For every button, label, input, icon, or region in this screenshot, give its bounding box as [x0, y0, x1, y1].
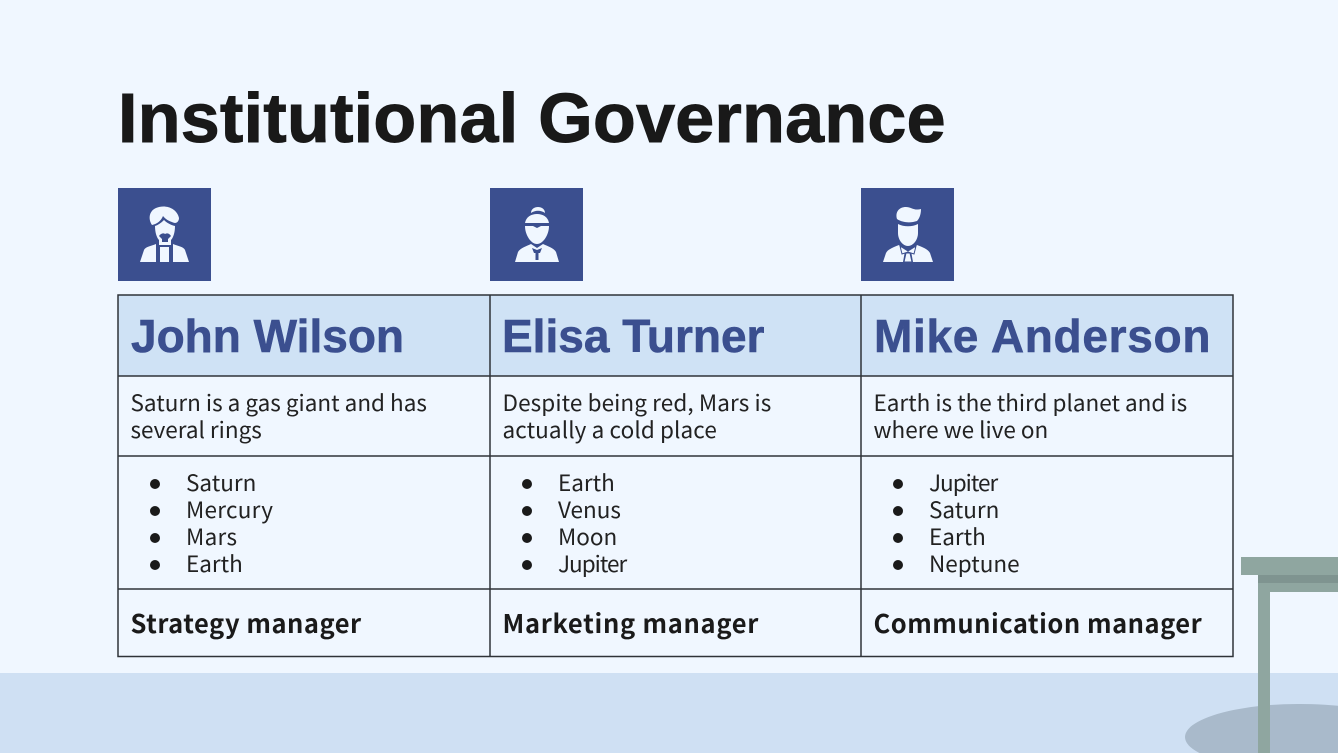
role: Communication manager [874, 604, 1202, 641]
table and shadow illustration [1185, 557, 1338, 753]
floor band [0, 673, 1338, 753]
planet list [150, 466, 273, 579]
name: Mike Anderson [874, 310, 1211, 362]
icon: man with beard [118, 188, 211, 281]
title: Institutional Governance [118, 79, 946, 157]
planet list: Earth [558, 466, 615, 498]
role: Marketing manager [502, 604, 759, 641]
name: John Wilson [131, 310, 404, 362]
column: Mike Anderson [874, 310, 1211, 641]
column: Elisa Turner [502, 310, 771, 641]
planet list: Jupiter [558, 547, 626, 579]
planet list: Saturn [186, 466, 256, 498]
planet list: Mars [186, 520, 237, 552]
table panel [117, 294, 1234, 658]
description: actually a cold place [502, 413, 717, 445]
column: John Wilson [130, 310, 427, 641]
description: several rings [130, 413, 262, 445]
description: Despite being red, Mars is [502, 386, 771, 418]
planet list: Saturn [929, 493, 999, 525]
planet list: Mercury [186, 493, 273, 525]
role: Strategy manager [130, 604, 362, 641]
planet list: Moon [558, 520, 617, 552]
name: Elisa Turner [502, 310, 764, 362]
icon: woman with glasses [490, 188, 582, 281]
description [874, 386, 1187, 445]
planet list [893, 466, 1020, 579]
description: where we live on [874, 413, 1048, 445]
planet list: Jupiter [929, 466, 997, 498]
planet list: Earth [929, 520, 986, 552]
icon: man with bow tie [861, 188, 954, 281]
description [502, 386, 771, 445]
description: Saturn is a gas giant and has [130, 386, 427, 418]
header row fill [118, 295, 1233, 376]
description [130, 386, 427, 445]
planet list: Earth [186, 547, 243, 579]
planet list [522, 466, 628, 579]
description: Earth is the third planet and is [874, 386, 1187, 418]
planet list: Neptune [929, 547, 1020, 579]
planet list: Venus [558, 493, 621, 525]
